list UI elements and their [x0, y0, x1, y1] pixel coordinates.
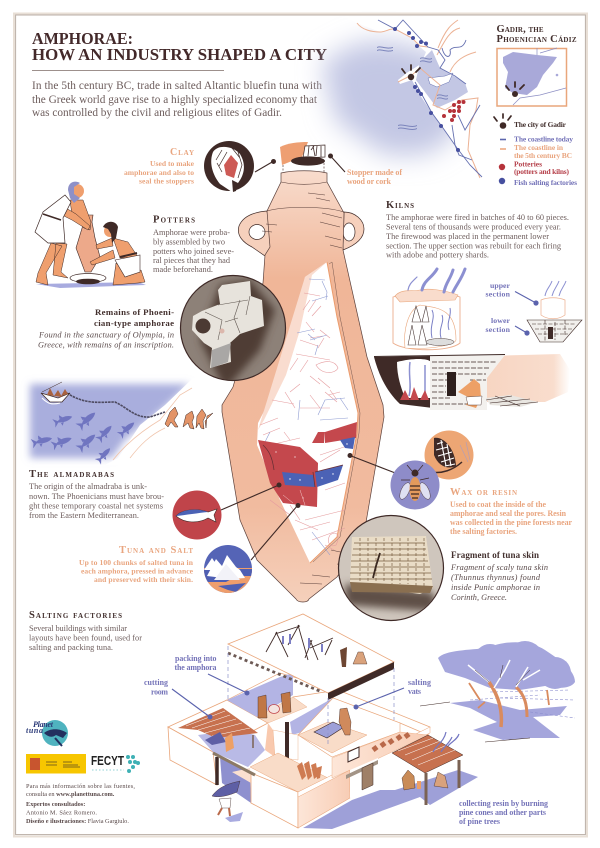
map of Gadir coast	[322, 17, 495, 192]
almadrabas text: The origin of the almadraba is unk-	[29, 482, 147, 491]
salting factories text	[29, 610, 142, 652]
icon: tuna	[172, 482, 282, 540]
tuna skin text: Fragment of scaly tuna skin	[450, 563, 548, 572]
illustration: potters	[35, 182, 146, 288]
credits: Diseño e ilustraciones: Flavia Gargiulo.	[26, 818, 129, 825]
icon: hands with clay	[204, 141, 276, 192]
intro text	[32, 80, 322, 119]
kiln diagram: small with labels	[486, 281, 582, 342]
resin label: of pine trees	[459, 817, 500, 826]
factory labels: room	[151, 688, 168, 696]
tuna and salt text: and preserved with their skin.	[94, 575, 193, 584]
tuna skin text: Fragment of tuna skin	[451, 550, 539, 560]
remains text	[38, 307, 174, 350]
kilns text: The amphorae were fired in batches of 40 to 60 pieces.	[386, 213, 569, 222]
stopper	[280, 142, 345, 172]
intro text: In the 5th century BC, trade in salted Altantic bluefin tuna with	[32, 80, 322, 92]
title: AMPHORAE:	[32, 29, 133, 48]
kiln diagram: small with labels: lower	[491, 316, 511, 325]
map legend	[494, 114, 577, 187]
map legend: Potteries	[514, 160, 542, 168]
credits: Para más información sobre las fuentes,	[26, 783, 135, 790]
lower peach floor	[250, 753, 328, 792]
kiln diagram: small with labels: section	[486, 325, 511, 334]
young potter	[90, 222, 145, 285]
tuna and salt text: Tuna and Salt	[119, 545, 193, 556]
potters text: potters who joined seve-	[153, 247, 234, 256]
potters text: ral pieces that they had	[153, 256, 231, 265]
amphora cutaway: tuna and salt	[257, 262, 360, 563]
tuna and salt text: Up to 100 chunks of salted tuna in	[79, 558, 194, 567]
illustration: almadraba fishing	[30, 378, 213, 465]
map legend: The coastline today	[514, 134, 573, 144]
title	[32, 29, 327, 64]
potters text: made beforehand.	[153, 265, 213, 274]
kilns text: with adobe and pottery shards.	[386, 250, 489, 260]
ground	[36, 282, 146, 288]
upper room	[227, 673, 338, 723]
vase	[76, 215, 100, 272]
resin shed	[392, 735, 463, 773]
illustration: pine trees	[420, 641, 575, 742]
wax or resin text: was collected in the pine forests near	[450, 518, 572, 527]
icon: pine cone	[424, 430, 474, 480]
inset map of Iberia	[497, 48, 566, 106]
resin label	[459, 799, 548, 826]
almadrabas text	[29, 469, 164, 520]
stopper label: wood or cork	[347, 177, 392, 186]
stopper label	[347, 168, 402, 186]
logo: Planet Tuna	[26, 720, 68, 746]
icon: bee	[348, 453, 440, 510]
left wing	[168, 700, 268, 752]
tuna skin text: Corinth, Greece.	[451, 593, 507, 602]
icon: salt mountains	[200, 503, 300, 596]
map legend: The city of Gadir	[514, 120, 567, 129]
map heading: Phoenician Cádiz	[496, 34, 577, 45]
cutting room pergola	[178, 708, 258, 738]
vat floor	[298, 722, 367, 753]
clay label: Clay	[170, 147, 194, 158]
wax or resin text: amphorae and seal the pores. Resin	[450, 509, 567, 518]
salting factories text: Several buildings with similar	[29, 624, 127, 633]
factory labels: salting	[408, 678, 431, 687]
factory labels: cutting	[144, 678, 168, 687]
kiln diagram: small with labels: section	[486, 290, 511, 298]
salting factories text: layouts have been found, used for	[29, 634, 142, 642]
old potter	[35, 182, 91, 285]
almadrabas text: ght these temporary coastal net systems	[29, 502, 163, 510]
clay label: Used to make	[150, 159, 195, 168]
wax or resin text: the salting factories.	[450, 527, 517, 536]
factory building	[168, 614, 478, 829]
map legend: (potters and kilns)	[514, 167, 570, 176]
remains text: Found in the sanctuary of Olympia, in	[38, 330, 174, 340]
map heading	[496, 24, 577, 45]
roof terrace	[228, 614, 394, 693]
salting factories text: Salting factories	[29, 610, 122, 621]
kiln diagram: large	[393, 269, 465, 350]
intro text: was controlled by the civil and religious elites of Gadir.	[32, 107, 282, 119]
credits	[26, 783, 135, 825]
credits: Antonio M. Sáez Romero.	[26, 810, 97, 816]
logo: Planet Tuna: tuna	[26, 726, 43, 735]
photo: tuna skin fragment	[338, 516, 444, 620]
remains text: cian-type amphorae	[94, 318, 174, 328]
kiln diagram: small with labels: upper	[490, 281, 511, 290]
wax or resin text: Wax or resin	[450, 487, 517, 498]
wax or resin text: Used to coat the inside of the	[450, 500, 546, 509]
wax or resin text	[450, 487, 572, 536]
clay label: amphorae and also to	[124, 168, 194, 177]
fish carrier	[212, 781, 240, 797]
almadrabas text: nown. The Phoenicians must have brou-	[29, 492, 164, 501]
potters text: bly assembled by two	[153, 238, 225, 246]
tuna skin text: inside Punic amphorae in	[451, 583, 540, 592]
photo: remains of amphora	[180, 276, 286, 390]
potters text	[153, 214, 234, 274]
tuna skin text: (Thunnus thynnus) found	[451, 573, 541, 582]
stopper label: Stopper made of	[347, 168, 402, 177]
resin label: pine cones and other parts	[459, 808, 546, 817]
factory labels: packing into	[175, 654, 217, 663]
credits: Expertos consultados:	[26, 801, 85, 808]
logo: Planet Tuna: Planet	[33, 720, 54, 729]
map legend: Fish salting factories	[514, 178, 577, 187]
title: HOW AN INDUSTRY SHAPED A CITY	[32, 45, 327, 64]
map heading: Gadir, the	[496, 24, 544, 35]
amphora body	[222, 171, 384, 602]
map legend: the 5th century BC	[514, 151, 572, 160]
almadrabas text: from the Eastern Mediterranean.	[29, 511, 139, 520]
clay label: seal the stoppers	[139, 176, 194, 186]
credits: consulta en www.planettuna.com.	[26, 791, 115, 798]
clay label	[124, 147, 195, 186]
tuna skin text	[450, 550, 548, 602]
people in rooms	[258, 695, 267, 718]
resin label: collecting resin by burning	[459, 799, 548, 808]
tuna and salt text: each amphora, pressed in advance	[81, 566, 194, 576]
tuna and salt text	[79, 545, 194, 584]
factory labels	[144, 654, 431, 720]
intro text: the Greek world gave rise to a highly specialized economy that	[32, 94, 318, 106]
kilns text: section. The upper section was rebuilt for each firing	[386, 242, 561, 250]
middle section	[250, 698, 333, 792]
logo: FECYT	[91, 754, 140, 773]
kiln cross-section	[374, 354, 570, 410]
remains text: Remains of Phoeni-	[95, 307, 174, 317]
remains text: Greece, with remains of an inscription.	[38, 340, 174, 350]
front walls	[251, 773, 298, 828]
kilns text	[386, 200, 569, 260]
almadrabas text: The almadrabas	[29, 469, 114, 480]
potters text: Amphorae were proba-	[153, 228, 230, 237]
kilns text: The firewood was placed in the permanent lower	[386, 232, 549, 241]
kilns text: Several tens of thousands were produced every year.	[386, 222, 561, 232]
logo: FECYT: FECYT	[91, 754, 124, 768]
factory labels: vats	[408, 687, 421, 696]
ground shadow	[303, 770, 478, 829]
salting factories text: salting and packing tuna.	[29, 643, 113, 652]
kilns text: Kilns	[386, 200, 414, 211]
map legend: The coastline in	[514, 143, 564, 152]
logo: Spanish government	[26, 754, 86, 774]
potters text: Potters	[153, 214, 195, 226]
amphora	[222, 142, 384, 602]
factory labels: the amphora	[174, 663, 217, 672]
